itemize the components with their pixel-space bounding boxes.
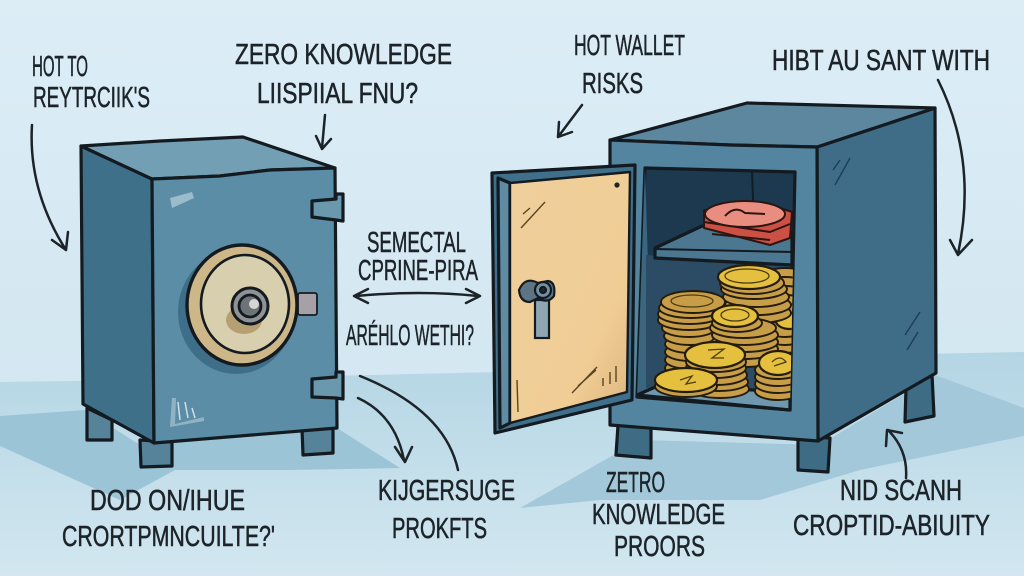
label: zero knowledge xyxy=(235,39,452,110)
left closed safe xyxy=(81,137,343,467)
label: bottom centre: PROKFTS xyxy=(392,513,487,545)
coins xyxy=(655,265,805,400)
back right stacks xyxy=(773,267,793,282)
label: how to: HOT TO xyxy=(32,51,88,83)
label: bottom right xyxy=(793,475,990,542)
floor shadows xyxy=(0,375,1024,508)
label: centre top xyxy=(358,227,478,287)
label: zero knowledge proofs xyxy=(592,467,725,563)
label: zero knowledge proofs: PROORS xyxy=(614,531,705,563)
label: how to: REYTRCIIK'S xyxy=(33,82,150,114)
floor of safe xyxy=(637,385,790,410)
label: zero knowledge: LIISPIIAL FNU? xyxy=(257,78,418,110)
label: zero knowledge proofs: ZETRO xyxy=(606,467,665,499)
label: hot wallet risks: HOT WALLET xyxy=(574,30,685,62)
label: bottom left: CRORTPMNCUILTE?' xyxy=(62,521,275,553)
label: centre top: SEMECTAL xyxy=(367,227,466,259)
label: hot wallet risks xyxy=(574,30,685,100)
safe top xyxy=(81,137,335,179)
dial xyxy=(178,245,317,374)
label: zero knowledge proofs: KNOWLEDGE xyxy=(592,499,725,531)
dial latch xyxy=(298,293,317,315)
hinges xyxy=(312,194,343,399)
label: hot wallet risks: RISKS xyxy=(582,68,643,100)
label: bottom left xyxy=(62,485,275,553)
double arrow xyxy=(354,289,480,303)
safe right side xyxy=(817,108,936,441)
arrow xyxy=(32,125,68,250)
interior xyxy=(637,168,795,410)
safe top xyxy=(610,103,935,147)
label: zero knowledge: ZERO KNOWLEDGE xyxy=(235,39,452,71)
front centre stack xyxy=(700,385,750,399)
label: bottom left: DOD ON/IHUE xyxy=(90,485,245,517)
arrow xyxy=(886,430,906,478)
safe front frame xyxy=(610,140,818,441)
scuff marks xyxy=(170,192,204,427)
arrow xyxy=(316,115,331,149)
open door xyxy=(492,165,635,433)
safe legs xyxy=(616,374,934,472)
label: bottom centre xyxy=(378,475,515,545)
far right stack xyxy=(754,384,791,401)
safe left side xyxy=(81,146,154,443)
left tall stack xyxy=(664,364,674,370)
label: centre top: CPRINE-PIRA xyxy=(358,255,478,287)
curved arrows to label xyxy=(358,376,458,470)
label: bottom centre: KIJGERSUGE xyxy=(378,475,515,507)
front left coin xyxy=(654,383,718,398)
middle stack xyxy=(746,359,759,368)
right open safe xyxy=(492,103,936,472)
shelf xyxy=(655,226,792,265)
door panel xyxy=(510,172,630,423)
label: bottom right: NID SCANH xyxy=(840,475,962,507)
safe legs xyxy=(87,408,333,467)
scuff marks xyxy=(833,158,920,350)
arrow xyxy=(558,105,582,137)
arrow xyxy=(938,80,972,255)
red stack xyxy=(704,201,792,245)
safe front xyxy=(152,168,337,443)
label: how to xyxy=(32,51,150,114)
label: centre bottom: ARÉHLO WETHI? xyxy=(346,319,474,352)
door handle xyxy=(519,281,554,338)
